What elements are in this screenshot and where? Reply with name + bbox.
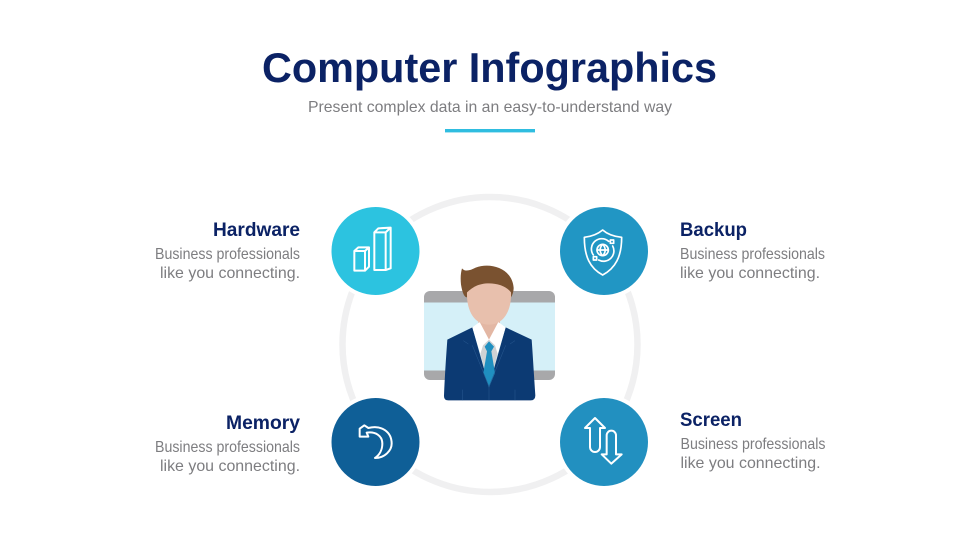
Screen heading: Screen [680, 410, 742, 431]
icon: shield with globe [584, 230, 622, 275]
icon: undo arrow [360, 425, 392, 458]
Backup text: Business professionals [680, 246, 825, 263]
Screen icon circle [560, 398, 648, 486]
Hardware text [155, 246, 300, 282]
title: Computer Infographics [262, 44, 717, 91]
title underline [445, 129, 535, 132]
Memory text: like you connecting. [160, 458, 300, 475]
Screen text: Business professionals [680, 436, 826, 453]
item: Backup [560, 207, 825, 295]
Backup text: like you connecting. [680, 265, 820, 282]
Backup icon circle [560, 207, 648, 295]
Backup text [680, 246, 825, 282]
Memory text [155, 439, 300, 475]
Memory heading: Memory [226, 413, 300, 434]
Backup heading: Backup [680, 220, 747, 241]
central illustration: businessman and monitor [424, 266, 555, 400]
Hardware heading: Hardware [213, 220, 300, 241]
Screen text [680, 436, 826, 472]
ring connecting the four items [342, 197, 638, 492]
Memory icon circle [332, 398, 420, 486]
item: Memory [155, 398, 420, 486]
Memory text: Business professionals [155, 439, 300, 456]
icon: bar chart [354, 228, 391, 271]
item: Hardware [155, 207, 420, 295]
monitor [424, 291, 555, 380]
Hardware icon circle [332, 207, 420, 295]
icon: up and down arrows [585, 418, 622, 464]
item: Screen [560, 398, 826, 486]
subtitle: Present complex data in an easy-to-understand way [308, 99, 672, 116]
Hardware text: Business professionals [155, 246, 300, 263]
Hardware text: like you connecting. [160, 265, 300, 282]
businessman [444, 266, 535, 400]
Screen text: like you connecting. [680, 455, 820, 472]
